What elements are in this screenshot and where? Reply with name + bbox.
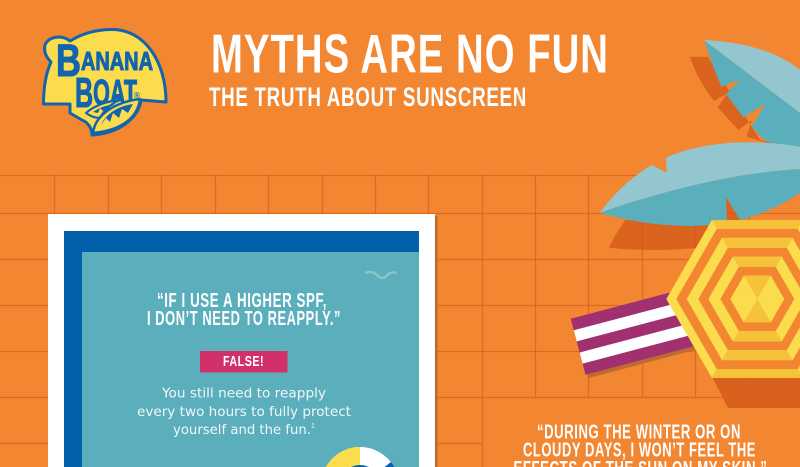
explanation text: 1	[311, 423, 315, 430]
logo registered mark: ®	[134, 91, 140, 100]
logo small leaf	[86, 100, 120, 118]
icon: wave	[365, 272, 396, 278]
explanation text: You still need to reapply	[161, 385, 326, 401]
myth quote	[147, 290, 341, 330]
logo wordmark: Boat: OAT	[93, 72, 137, 113]
explanation text: every two hours to fully protect	[137, 404, 351, 420]
icon: beach ball	[321, 447, 399, 467]
card teal panel	[82, 252, 419, 467]
palm leaves	[600, 40, 800, 226]
upper leaf	[704, 40, 800, 150]
umbrella shadow	[713, 378, 800, 408]
card shadow	[435, 216, 438, 467]
false badge	[200, 351, 288, 372]
explanation text	[137, 385, 351, 438]
explanation text: yourself and the fun.	[173, 422, 311, 438]
myth quote: “IF I USE A HIGHER SPF,	[157, 290, 327, 312]
logo wordmark: Banana: B	[56, 35, 88, 86]
leaf shadows	[609, 57, 800, 250]
title: MYTHS ARE NO FUN	[211, 23, 609, 85]
myth quote: I DON’T NEED TO REAPPLY.”	[147, 308, 341, 330]
lower leaf	[600, 142, 800, 226]
logo wordmark: Banana: ANANA	[81, 46, 153, 76]
beach umbrella	[666, 220, 800, 378]
second myth quote	[514, 421, 768, 467]
logo wordmark: Boat: B	[75, 69, 105, 116]
logo main leaf	[93, 99, 140, 133]
card frame	[48, 214, 435, 467]
false badge: FALSE!	[223, 354, 264, 370]
panel: myth card	[48, 214, 438, 467]
card blue border	[64, 231, 419, 467]
striped towel	[571, 285, 714, 378]
logo: Banana Boat	[44, 30, 166, 135]
subtitle: THE TRUTH ABOUT SUNSCREEN	[209, 82, 527, 112]
